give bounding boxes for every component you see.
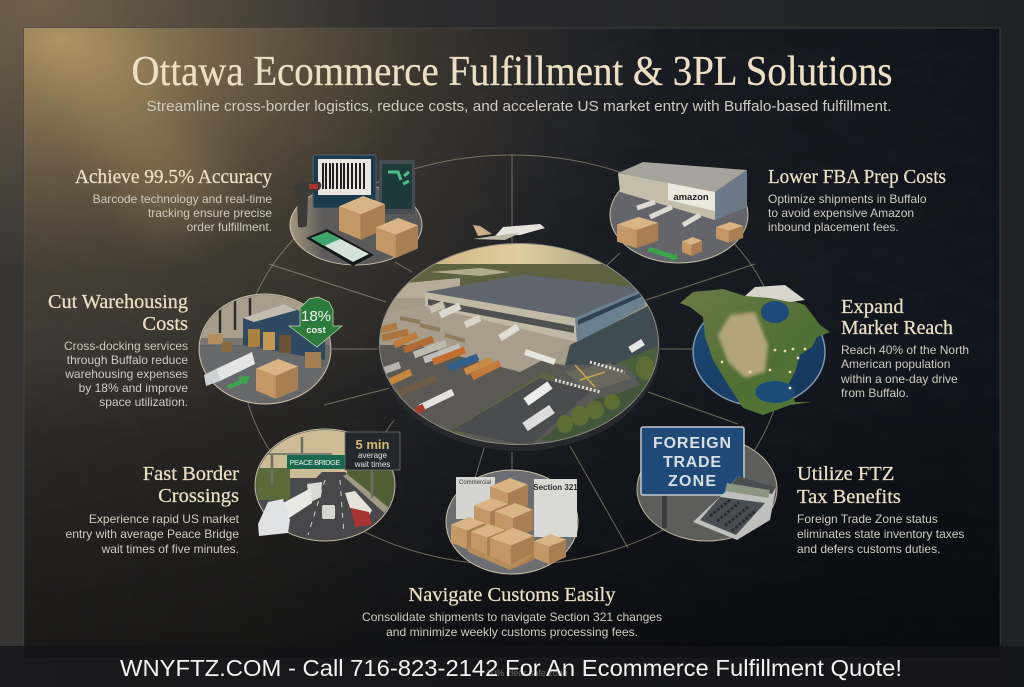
central warehouse hub disk bbox=[378, 240, 660, 451]
text block: FTZ: eliminates state inventory taxes bbox=[797, 527, 964, 541]
text block: FTZ: and defers customs duties. bbox=[797, 542, 940, 556]
truck box bbox=[682, 237, 702, 256]
footer bar: WNYFTZ.COM - Call 716-823-2142 For An Ecommerce Fulfillment Quote! bbox=[120, 655, 902, 681]
icon: barcode scanner bbox=[292, 182, 321, 227]
pallet bbox=[716, 222, 743, 243]
text block: customs: and minimize weekly customs processing fees. bbox=[386, 625, 638, 639]
icon: boxes bbox=[339, 196, 418, 258]
warehouse building bbox=[425, 275, 645, 342]
callout: 5 min: 5 min bbox=[356, 437, 390, 452]
panel: customs vignette bbox=[446, 470, 578, 574]
text block: FBA: to avoid expensive Amazon bbox=[768, 206, 914, 220]
text block: FBA: Optimize shipments in Buffalo bbox=[768, 192, 927, 206]
footer bar: 10% clear safe zone bbox=[486, 668, 568, 678]
trailers in the yard bbox=[380, 304, 643, 427]
icon: phone bbox=[306, 229, 374, 266]
document: Section 321: Section 321 bbox=[533, 483, 578, 492]
text block: customs: Navigate Customs Easily bbox=[408, 584, 616, 606]
arrow: green bbox=[226, 376, 250, 389]
text block: warehousing: Cross-docking services bbox=[64, 339, 188, 353]
text block: border: Fast Border bbox=[143, 463, 239, 485]
text block: warehousing: through Buffalo reduce bbox=[67, 353, 188, 367]
panel: accuracy vignette bbox=[290, 155, 422, 266]
text block: FTZ bbox=[797, 463, 964, 556]
truck bbox=[204, 352, 255, 386]
arrow: green bbox=[647, 247, 678, 262]
text block: FBA: inbound placement fees. bbox=[768, 220, 899, 234]
panel: map vignette bbox=[680, 285, 830, 415]
text block: FBA: Lower FBA Prep Costs bbox=[768, 166, 946, 188]
icon: 18% cost badge: cost bbox=[306, 325, 327, 336]
text block: FTZ: Foreign Trade Zone status bbox=[797, 512, 938, 526]
sign: Foreign Trade Zone: FOREIGN bbox=[653, 435, 731, 452]
text block: border: Crossings bbox=[158, 485, 239, 507]
footer bar bbox=[0, 646, 1024, 687]
text block: reach: Market Reach bbox=[841, 317, 953, 339]
text block: border: wait times of five minutes. bbox=[101, 542, 239, 556]
icon: calculator bbox=[693, 476, 776, 540]
text block: FBA bbox=[768, 166, 946, 234]
text block: customs bbox=[362, 584, 662, 639]
icon: tablet bbox=[379, 160, 415, 214]
icon: pallet of boxes bbox=[451, 478, 566, 570]
text block: reach: American population bbox=[841, 357, 950, 371]
box bbox=[617, 217, 658, 248]
subtitle: Streamline cross-border logistics, reduce costs, and accelerate US market entry with Buffalo-based fulfillment. bbox=[146, 99, 892, 115]
text block: warehousing: space utilization. bbox=[99, 395, 188, 409]
icon: 18% cost badge: 18% bbox=[301, 308, 331, 325]
text block: FTZ: Utilize FTZ bbox=[797, 463, 894, 485]
document: commercial invoice: Commercial bbox=[459, 480, 491, 486]
icon: 18% cost badge bbox=[289, 297, 342, 347]
panel: border vignette bbox=[255, 428, 400, 548]
text block: accuracy bbox=[75, 166, 273, 234]
trucks bbox=[258, 482, 372, 536]
text block: reach bbox=[840, 296, 969, 400]
trees bbox=[557, 356, 654, 433]
text block: warehousing bbox=[48, 291, 188, 409]
text block: warehousing: by 18% and improve bbox=[79, 381, 188, 395]
text block: warehousing: warehousing expenses bbox=[64, 367, 188, 381]
text block: warehousing: Costs bbox=[142, 313, 188, 335]
panel: FTZ vignette bbox=[637, 427, 777, 541]
text block: warehousing: Cut Warehousing bbox=[48, 291, 188, 313]
sign: Foreign Trade Zone: ZONE bbox=[668, 473, 716, 490]
title: Ottawa Ecommerce Fulfillment & 3PL Solutions bbox=[132, 49, 892, 95]
text block: accuracy: tracking ensure precise bbox=[148, 206, 272, 220]
warehouse: amazon bbox=[673, 192, 709, 203]
text block: border: entry with average Peace Bridge bbox=[66, 527, 239, 541]
callout: 5 min: average bbox=[358, 451, 388, 460]
road crossing bbox=[555, 362, 632, 392]
sign: Peace Bridge: PEACE BRIDGE bbox=[290, 458, 340, 467]
sign: Foreign Trade Zone: TRADE bbox=[663, 454, 721, 471]
text block: border bbox=[66, 463, 240, 556]
text block: reach: from Buffalo. bbox=[841, 386, 909, 400]
text block: customs: Consolidate shipments to navigate Section 321 changes bbox=[362, 610, 662, 624]
text block: reach: Expand bbox=[841, 296, 904, 318]
text block: border: Experience rapid US market bbox=[89, 512, 240, 526]
box bbox=[256, 359, 298, 399]
icon: barcode monitor bbox=[313, 155, 376, 208]
text block: FTZ: Tax Benefits bbox=[797, 486, 901, 508]
sign: Foreign Trade Zone bbox=[641, 427, 744, 495]
map: North America bbox=[680, 285, 830, 415]
panel: FBA vignette bbox=[610, 162, 748, 263]
sign: Peace Bridge bbox=[287, 455, 345, 469]
panel: warehousing vignette bbox=[199, 294, 342, 405]
text block: accuracy: Achieve 99.5% Accuracy bbox=[75, 166, 273, 188]
text block: accuracy: order fulfillment. bbox=[187, 220, 272, 234]
text block: reach: Reach 40% of the North bbox=[841, 343, 969, 357]
text block: accuracy: Barcode technology and real-time bbox=[93, 192, 272, 206]
trucks bbox=[637, 202, 700, 225]
callout: 5 min bbox=[345, 432, 400, 470]
icon: airplane bbox=[473, 224, 545, 243]
network connector lines bbox=[242, 155, 782, 565]
text block: reach: within a one-day drive bbox=[840, 372, 958, 386]
callout: 5 min: wait times bbox=[354, 460, 390, 469]
